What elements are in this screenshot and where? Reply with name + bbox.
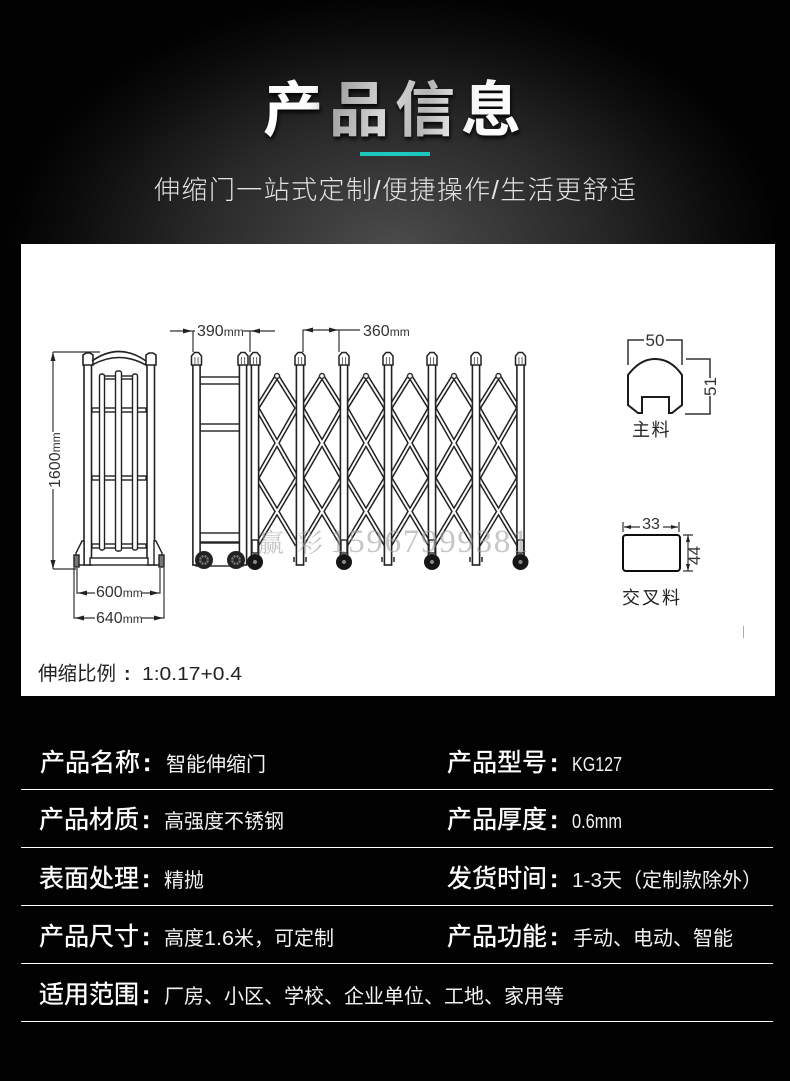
row 3: finish and delivery bbox=[21, 865, 773, 906]
row 5: scope: 适用范围 bbox=[39, 981, 139, 1009]
dimension: 640mm bbox=[74, 568, 164, 627]
main profile section bbox=[628, 331, 720, 440]
row 2: material and thickness: : bbox=[550, 806, 558, 834]
dimension: 33: 33 bbox=[642, 516, 660, 533]
title: 产品信息 bbox=[263, 77, 527, 144]
cross profile section bbox=[622, 516, 704, 608]
row 4: size and function: 手动、电动、智能 bbox=[573, 927, 733, 950]
scissor lattice bbox=[257, 374, 518, 545]
dimension: 1600mm: 1600mm bbox=[47, 432, 64, 488]
watermark: 彩 bbox=[297, 529, 323, 558]
panel: drawing sheet bbox=[21, 244, 775, 696]
watermark: 赢 bbox=[258, 529, 284, 558]
dimension: 390mm: 390mm bbox=[197, 323, 244, 340]
row 2: material and thickness: 产品厚度 bbox=[447, 806, 547, 834]
inner tubes and crossbars bbox=[92, 371, 146, 551]
subtitle: 伸缩门一站式定制/便捷操作/生活更舒适 bbox=[154, 175, 636, 205]
row 1: name and model: : bbox=[143, 749, 151, 777]
row 3: finish and delivery: 精抛 bbox=[164, 869, 204, 892]
ratio caption: : bbox=[124, 663, 130, 685]
row 1: name and model bbox=[21, 749, 773, 790]
caster wheels bbox=[247, 540, 528, 570]
dimension: 600mm: 600mm bbox=[96, 584, 143, 601]
dimension: 640mm: 640mm bbox=[96, 610, 143, 627]
ratio caption: 伸缩比例 bbox=[38, 663, 116, 685]
stray tick mark bbox=[743, 626, 744, 638]
dimension: 360mm bbox=[303, 323, 410, 352]
row 2: material and thickness: 产品材质 bbox=[39, 806, 139, 834]
vertical posts bbox=[250, 352, 526, 565]
row 3: finish and delivery: 天（定制款除外） bbox=[602, 869, 762, 892]
row 2: material and thickness bbox=[21, 806, 773, 848]
dimension: 1600mm bbox=[47, 352, 100, 569]
row 1: name and model: 产品型号 bbox=[447, 749, 547, 777]
row 4: size and function: 高度 bbox=[164, 928, 204, 950]
watermark: 15967999381 bbox=[330, 524, 530, 560]
row 4: size and function: : bbox=[142, 923, 150, 951]
dimension: 390mm bbox=[170, 323, 275, 352]
front view drawing bbox=[47, 352, 164, 627]
row 5: scope: 厂房、小区、学校、企业单位、工地、家用等 bbox=[164, 985, 564, 1008]
base and feet bbox=[74, 541, 164, 567]
dimension: 50: 50 bbox=[646, 331, 664, 350]
header glow bbox=[0, 0, 790, 244]
row 1: name and model: KG127 bbox=[572, 754, 622, 776]
folded frame bbox=[192, 352, 248, 566]
dimension: 51: 51 bbox=[701, 377, 720, 396]
row 4: size and function: 米，可定制 bbox=[234, 927, 334, 950]
row 1: name and model: 产品名称 bbox=[40, 749, 140, 777]
row 3: finish and delivery: 1-3 bbox=[572, 870, 602, 892]
row 5: scope bbox=[21, 981, 773, 1022]
side posts and arch bbox=[83, 352, 156, 565]
row 4: size and function: 1.6 bbox=[204, 928, 234, 950]
profile rectangle bbox=[623, 535, 680, 571]
row 1: name and model: : bbox=[550, 749, 558, 777]
extended lattice gate drawing bbox=[247, 323, 528, 570]
row 3: finish and delivery: : bbox=[550, 865, 558, 893]
row 4: size and function: 产品功能 bbox=[447, 923, 547, 951]
cross profile label: 交叉料 bbox=[622, 588, 682, 608]
profile outline bbox=[628, 359, 682, 413]
row 2: material and thickness: 0.6mm bbox=[572, 811, 622, 833]
row 3: finish and delivery: 表面处理 bbox=[39, 865, 139, 893]
row 4: size and function bbox=[21, 923, 773, 964]
row 2: material and thickness: : bbox=[142, 806, 150, 834]
row 4: size and function: 产品尺寸 bbox=[39, 923, 139, 951]
main profile label: 主料 bbox=[632, 420, 671, 440]
row 4: size and function: : bbox=[550, 923, 558, 951]
ratio caption: 1:0.17+0.4 bbox=[142, 664, 242, 684]
row 1: name and model: 智能伸缩门 bbox=[166, 753, 266, 776]
frame wheels bbox=[195, 551, 245, 569]
side view drawing bbox=[170, 323, 275, 569]
dimension: 44: 44 bbox=[685, 546, 704, 565]
spec table bbox=[21, 749, 773, 1022]
row 2: material and thickness: 高强度不锈钢 bbox=[164, 810, 284, 833]
row 5: scope: : bbox=[142, 981, 150, 1009]
teal accent bar bbox=[360, 152, 430, 156]
dimension: 360mm: 360mm bbox=[363, 323, 410, 340]
dimension: 600mm bbox=[77, 568, 160, 601]
row 3: finish and delivery: 发货时间 bbox=[447, 865, 547, 893]
row 3: finish and delivery: : bbox=[142, 865, 150, 893]
